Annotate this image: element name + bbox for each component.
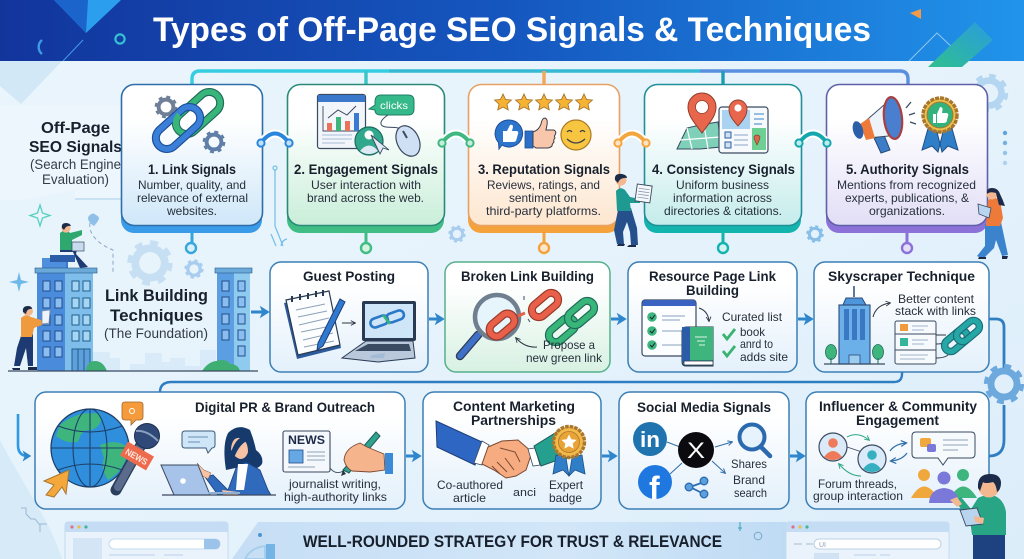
panel: 2 Engagement Signals: 2. Engagement Signals [294,162,438,177]
icon: connected people [819,433,907,476]
bus: top connector [192,71,908,84]
icon: large gear [130,244,170,282]
sparkles [30,205,50,226]
panel: Content Marketing Partnerships [423,392,601,509]
panel: Influencer and Community Engagement: Engagement [856,413,940,428]
panel: Digital PR and Brand Outreach: high-authority links [284,490,387,504]
panel: Social Media Signals [619,392,789,509]
panel: Content Marketing Partnerships: Expert [549,478,584,492]
icon: cursor arrow [44,470,69,497]
icon: speech bubble [182,431,215,453]
panel: 3 Reputation Signals: Reviews, ratings, and [487,178,600,192]
panel: 2 Engagement Signals [287,84,444,233]
icon: chain with gears [151,87,225,154]
panel: Social Media Signals: Social Media Signals [637,400,771,415]
panel: 1 Link Signals: 1. Link Signals [148,162,236,177]
icon: community group [911,469,977,503]
right building [215,268,252,371]
panel: 5 Authority Signals [826,84,988,233]
icon: LinkedIn [633,422,667,456]
icon: small gear [186,261,202,277]
arrow into Digital PR [18,414,28,456]
icon: search magnifier [740,424,770,456]
heading: Link Building Techniques: Techniques [110,306,203,325]
icon: hand with pen [341,432,393,476]
panel: 5 Authority Signals: 5. Authority Signals [846,162,969,177]
arc connector 4 to 5 [795,134,831,147]
panel: 4 Consistency Signals: information across [673,191,772,205]
panel: 1 Link Signals: Number, quality, and [138,178,246,192]
standing man with paper [12,306,50,370]
panel: Guest Posting [270,262,428,372]
arrow to Content Marketing [406,454,418,458]
panel: Resource Page Link Building: adds site [740,350,788,364]
arrow to Influencer [790,454,802,458]
panel: Resource Page Link Building: anrd to [740,337,773,351]
decorative gear top right [972,76,1006,110]
panel: 3 Reputation Signals: third-party platforms. [486,204,601,218]
bottom banner [232,522,786,559]
arrow to Skyscraper Technique [798,318,810,320]
icon: right gear [987,367,1021,401]
icon: microphone with NEWS flag [116,424,160,490]
heading: Link Building Techniques: (The Foundation) [104,325,208,341]
panel: 5 Authority Signals: experts, publications, & [845,191,969,205]
arc connector 2 to 3 [438,134,474,147]
panel: Content Marketing Partnerships: anci [513,487,536,499]
connecting lines [667,442,682,474]
heading: Off-Page SEO Signals: (Search Engine [30,157,121,172]
panel: Broken Link Building: Propose a [543,338,595,352]
panel: 5 Authority Signals: organizations. [869,204,945,218]
illustration: city buildings with figures [8,205,258,371]
panel: Resource Page Link Building: Curated list [722,310,783,324]
icon: stars, thumbs and smiley [495,94,592,150]
panel: 4 Consistency Signals: directories & citations. [664,204,782,218]
panel: 4 Consistency Signals [644,84,802,233]
panel: 3 Reputation Signals: sentiment on [509,191,577,205]
browser window left [65,522,228,559]
panel: Broken Link Building: new green link [526,351,603,365]
squiggle decoration [21,508,47,532]
heading: Off-Page SEO Signals: SEO Signals [29,139,122,156]
icon: Facebook: f [649,470,660,506]
panel: Skyscraper Technique: Skyscraper Technique [828,269,976,284]
ground line [8,370,258,372]
arc connector 1 to 2 [257,134,293,147]
icon: microphone with NEWS flag: NEWS [124,447,149,467]
panel: Guest Posting: Guest Posting [303,269,395,284]
icon: star medal [553,426,585,476]
icon: map, pins and directory [677,93,768,153]
panel: Content Marketing Partnerships: Co-authored [437,478,503,492]
panel: Resource Page Link Building: book [740,325,766,339]
browser window right [786,522,949,559]
panel: Digital PR and Brand Outreach: Digital PR & Brand Outreach [195,399,375,415]
connector: right gear to Influencer [989,405,1004,456]
icon: magnifier over broken red link [460,290,561,356]
heading: Off-Page SEO Signals [0,106,122,200]
icon: checklist window [642,300,709,356]
illustration: woman at laptop [197,427,271,496]
panel: 3 Reputation Signals: 3. Reputation Signals [478,162,610,177]
panel: 2 Engagement Signals: brand across the web. [307,191,424,205]
skyline backdrop [93,350,216,371]
icon: green chain [546,298,597,345]
left building [35,258,97,371]
seated man with laptop [50,223,88,268]
heading: Link Building Techniques [104,286,208,341]
icon: newspaper [283,431,345,473]
icon: globe [51,409,129,487]
icon: notebook and pen [284,290,355,359]
header band [0,0,1024,67]
heading: Off-Page SEO Signals: Evaluation) [42,172,109,187]
icon: skyscraper with trees [824,286,890,364]
panel: 1 Link Signals: relevance of external [137,191,248,205]
dashed path [90,223,113,274]
icon: laptop [161,465,276,495]
icon: stacked content with chain [895,318,982,364]
panel: 4 Consistency Signals: Uniform business [676,178,769,192]
panel: 3 Reputation Signals [468,84,620,233]
small gears between cards [450,226,822,242]
panel: 5 Authority Signals: Mentions from recognized [837,178,976,192]
icon: X: X [687,438,705,463]
panel: Influencer and Community Engagement: Influencer & Community [819,399,977,414]
title: Types of Off-Page SEO Signals & Techniques [153,11,871,49]
dots right side [1003,131,1007,165]
panel: Digital PR and Brand Outreach: journalist writing, [288,477,381,491]
panel: Content Marketing Partnerships: article [453,491,486,505]
panel: Influencer and Community Engagement: group interaction [813,489,903,503]
icon: analytics, clicks bubble and mouse: clicks [380,101,408,112]
panel: Content Marketing Partnerships: badge [549,491,582,505]
icon: X [678,432,714,468]
icon: orange speech bubble [122,402,143,425]
small decorative circuit [271,166,287,246]
panel: Content Marketing Partnerships: Content Marketing [453,399,575,414]
panel: Social Media Signals: Shares [731,457,767,471]
panel: Skyscraper Technique: Better content [898,292,975,306]
bottom banner: WELL-ROUNDED STRATEGY FOR TRUST & RELEVANCE [303,533,722,551]
icon: green book [682,327,713,366]
arrow to Social Media Signals [602,454,614,458]
arrow to Guest Posting [251,310,266,314]
person: man with document [614,174,652,247]
panel: 2 Engagement Signals: User interaction with [311,178,421,192]
icon: LinkedIn: in [640,427,660,452]
panel: Digital PR and Brand Outreach [35,392,405,509]
panel: Content Marketing Partnerships: Partnerships [471,413,556,428]
icon: chat box [912,432,975,465]
panel: Resource Page Link Building: Resource Page Link [649,269,776,284]
panel: Skyscraper Technique [814,262,989,372]
panel: Resource Page Link Building [628,262,797,372]
browser window right: UI [819,542,826,549]
bushes [86,360,240,371]
panel: 4 Consistency Signals: 4. Consistency Signals [652,162,795,177]
arrow to Broken Link Building [429,318,441,320]
bus: bottom connector [186,233,912,253]
background shape: pale triangle [0,61,62,104]
panel: Social Media Signals: search [734,486,767,500]
heading: Off-Page SEO Signals: Off-Page [41,120,110,137]
background glow bottom left [0,440,62,559]
panel: Influencer and Community Engagement: Forum threads, [818,477,897,491]
icon: green check marks [723,329,735,356]
connector: skyscraper to right gear [989,319,1004,369]
icon: handshake [436,421,572,478]
icon: share nodes [685,477,708,498]
person: woman with tablet [977,188,1008,259]
connector: row 2 to row 3 [160,372,902,392]
icon: megaphone and award badge [851,96,958,153]
person: presenter with tablet [950,474,1006,559]
heading: Link Building Techniques: Link Building [105,286,208,305]
panel: 1 Link Signals: websites. [166,204,217,218]
icon: analytics, clicks bubble and mouse [318,94,425,160]
panel: Skyscraper Technique: stack with links [895,304,976,318]
icon: small cloud [88,214,99,226]
icon: Facebook [638,465,672,506]
panel: Broken Link Building: Broken Link Building [461,269,594,284]
panel: Resource Page Link Building: Building [686,283,739,298]
icon: laptop with chain [342,301,416,362]
icon: newspaper: NEWS [288,433,325,447]
panel: Broken Link Building [445,262,610,372]
arrow to Resource Page Link Building [611,318,623,320]
panel: 1 Link Signals [121,84,262,233]
panel: Social Media Signals: Brand [733,473,765,487]
arc connector 3 to 4 [614,134,650,147]
panel: Influencer and Community Engagement [806,392,989,509]
